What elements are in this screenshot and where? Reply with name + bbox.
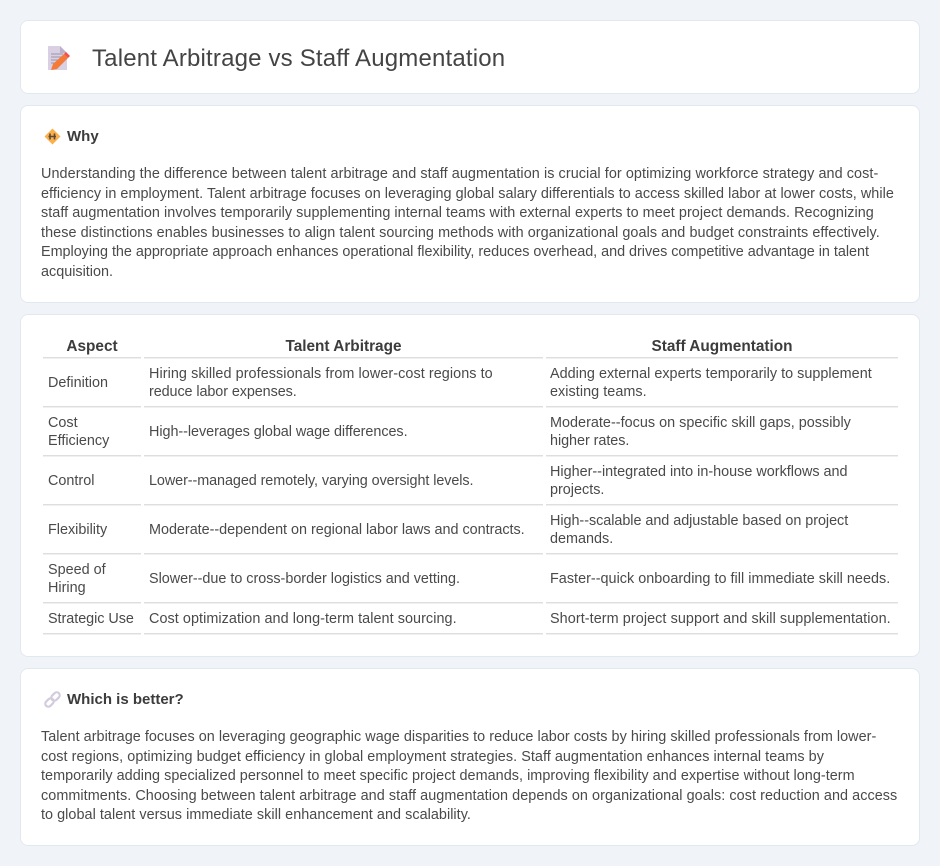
panel: why [20, 105, 920, 303]
panel: title header [20, 20, 920, 94]
row: control: projects. [550, 482, 604, 498]
text block: why paragraph: efficiency in employment. Talent arbitrage focuses on leveraging global salary differentials to access skilled labor at lower costs, while [41, 186, 894, 202]
heading: why: Why [67, 128, 99, 145]
row: strategic use [43, 602, 898, 635]
row: definition [43, 357, 898, 400]
row: cost efficiency [43, 406, 898, 449]
row: speed of hiring: Hiring [48, 580, 86, 596]
panel: comparison table [20, 314, 920, 657]
text block: why paragraph: staff augmentation involves temporarily supplementing internal teams with external experts to meet project demands. Recognizing [41, 205, 874, 221]
row: cost efficiency: High--leverages global wage differences. [149, 424, 408, 440]
icon: chain link [44, 691, 61, 708]
panel: which is better [20, 668, 920, 846]
table header row: Staff Augmentation [651, 338, 793, 355]
row: definition: reduce labor expenses. [149, 384, 297, 400]
text block: why paragraph: Understanding the difference between talent arbitrage and staff augmentation is crucial for optimizing workforce strategy and cost- [41, 166, 878, 182]
text block: which is better paragraph [41, 729, 897, 823]
row: flexibility: demands. [550, 531, 613, 547]
icon: document with pencil [48, 46, 70, 70]
row: strategic use: Short-term project support and skill supplementation. [550, 611, 891, 627]
row: cost efficiency: Moderate--focus on specific skill gaps, possibly [550, 415, 851, 431]
row: flexibility [43, 504, 898, 547]
row: definition: Definition [48, 375, 108, 391]
text block: why paragraph: Employing the appropriate approach enhances operational flexibility, reduces overhead, and drives competitive advantage in talent [41, 244, 869, 260]
text block: which is better paragraph: commitments. Choosing between talent arbitrage and staff augmentation depends on organizational goals: cost reduction and access [41, 788, 897, 804]
heading: which is better: Which is better? [67, 691, 184, 708]
row: cost efficiency: Cost [48, 415, 78, 431]
row: flexibility: High--scalable and adjustable based on project [550, 513, 848, 529]
row: definition: existing teams. [550, 384, 647, 400]
text block: which is better paragraph: temporarily adding specialized personnel to meet specific project demands, improving flexibility and expertise without long-term [41, 768, 855, 784]
row: cost efficiency: Efficiency [48, 433, 109, 449]
text block: which is better paragraph: cost regions, optimizing budget efficiency in global employment strategies. Staff augmentation enhances internal teams by [41, 748, 824, 764]
row: definition: Adding external experts temporarily to supplement [550, 366, 872, 382]
row: speed of hiring: Faster--quick onboarding to fill immediate skill needs. [550, 571, 890, 587]
row: cost efficiency: higher rates. [550, 433, 629, 449]
row: control: Lower--managed remotely, varying oversight levels. [149, 473, 473, 489]
row: speed of hiring: Speed of [48, 562, 106, 578]
row: flexibility: Moderate--dependent on regional labor laws and contracts. [149, 522, 525, 538]
row: strategic use: Strategic Use [48, 611, 134, 627]
text block: why paragraph [41, 166, 894, 280]
text block: which is better paragraph: Talent arbitrage focuses on leveraging geographic wage disparities to reduce labor costs by hiring skilled professionals from lower- [41, 729, 876, 745]
row: control: Higher--integrated into in-house workflows and [550, 464, 848, 480]
row: definition: Hiring skilled professionals from lower-cost regions to [149, 366, 493, 382]
text block: which is better paragraph: to global talent versus immediate skill enhancement and scalability. [41, 807, 471, 823]
row: strategic use: Cost optimization and long-term talent sourcing. [149, 611, 457, 627]
row: speed of hiring: Slower--due to cross-border logistics and vetting. [149, 571, 460, 587]
title: Talent Arbitrage vs Staff Augmentation [92, 45, 505, 72]
icon: diamond warning sign [44, 128, 60, 144]
row: speed of hiring [43, 553, 898, 596]
row: control: Control [48, 473, 94, 489]
text block: why paragraph: these distinctions enables businesses to align talent sourcing methods with organizational goals and budget constraints effectively. [41, 224, 880, 240]
text block: why paragraph: acquisition. [41, 264, 113, 280]
row: control [43, 455, 898, 498]
row: flexibility: Flexibility [48, 522, 107, 538]
table header row: Aspect [66, 338, 118, 355]
table header row [66, 338, 793, 355]
table header row: Talent Arbitrage [285, 338, 402, 355]
